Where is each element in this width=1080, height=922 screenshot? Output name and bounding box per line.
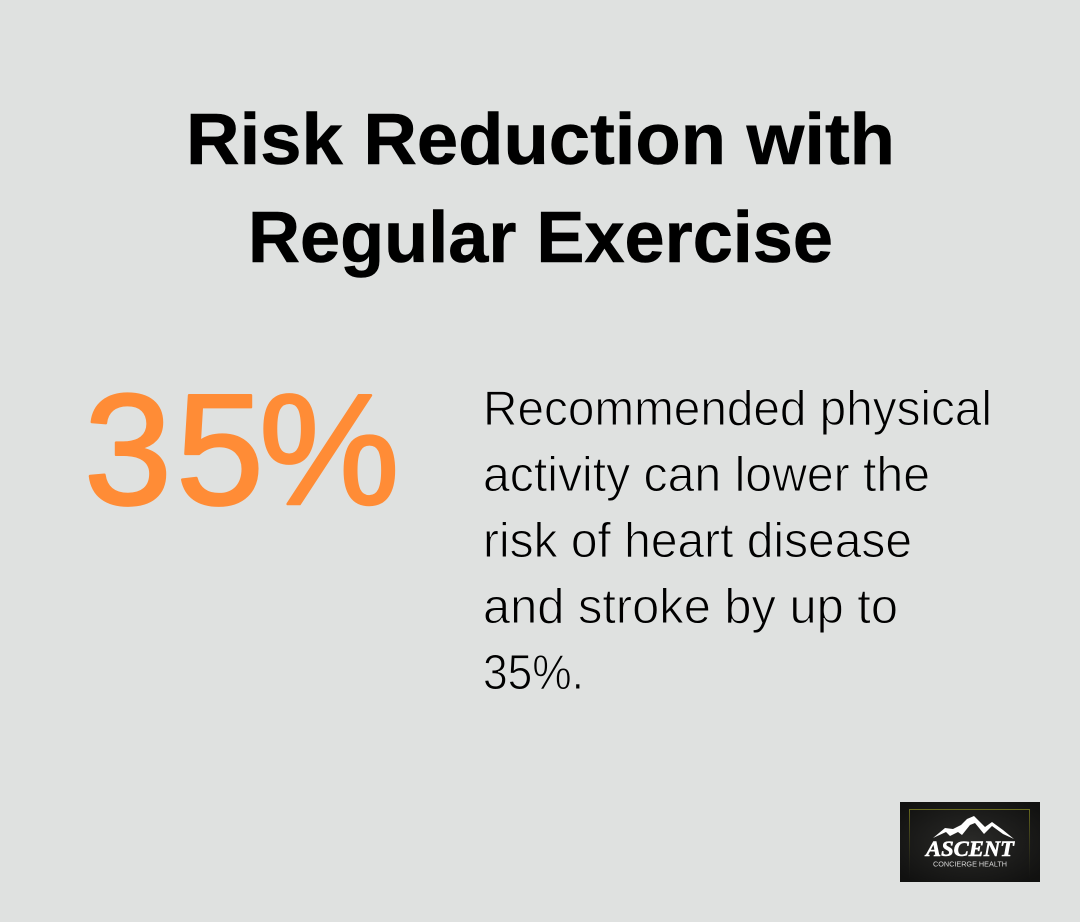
logo tagline: CONCIERGE HEALTH	[933, 860, 1007, 868]
description text: risk of heart disease	[483, 514, 912, 568]
description text: Recommended physical	[483, 382, 992, 436]
description text: and stroke by up to	[483, 580, 898, 634]
logo: Ascent Concierge Health	[900, 802, 1040, 882]
description text: activity can lower the	[483, 448, 930, 502]
icon: mountains	[933, 816, 1014, 839]
title	[186, 100, 895, 278]
title: Risk Reduction with	[186, 100, 895, 180]
description text: 35%.	[483, 646, 584, 700]
big statistic: 35%	[84, 362, 400, 538]
title: Regular Exercise	[248, 198, 833, 278]
logo wordmark: ASCENT	[924, 836, 1016, 861]
description text	[483, 382, 992, 700]
